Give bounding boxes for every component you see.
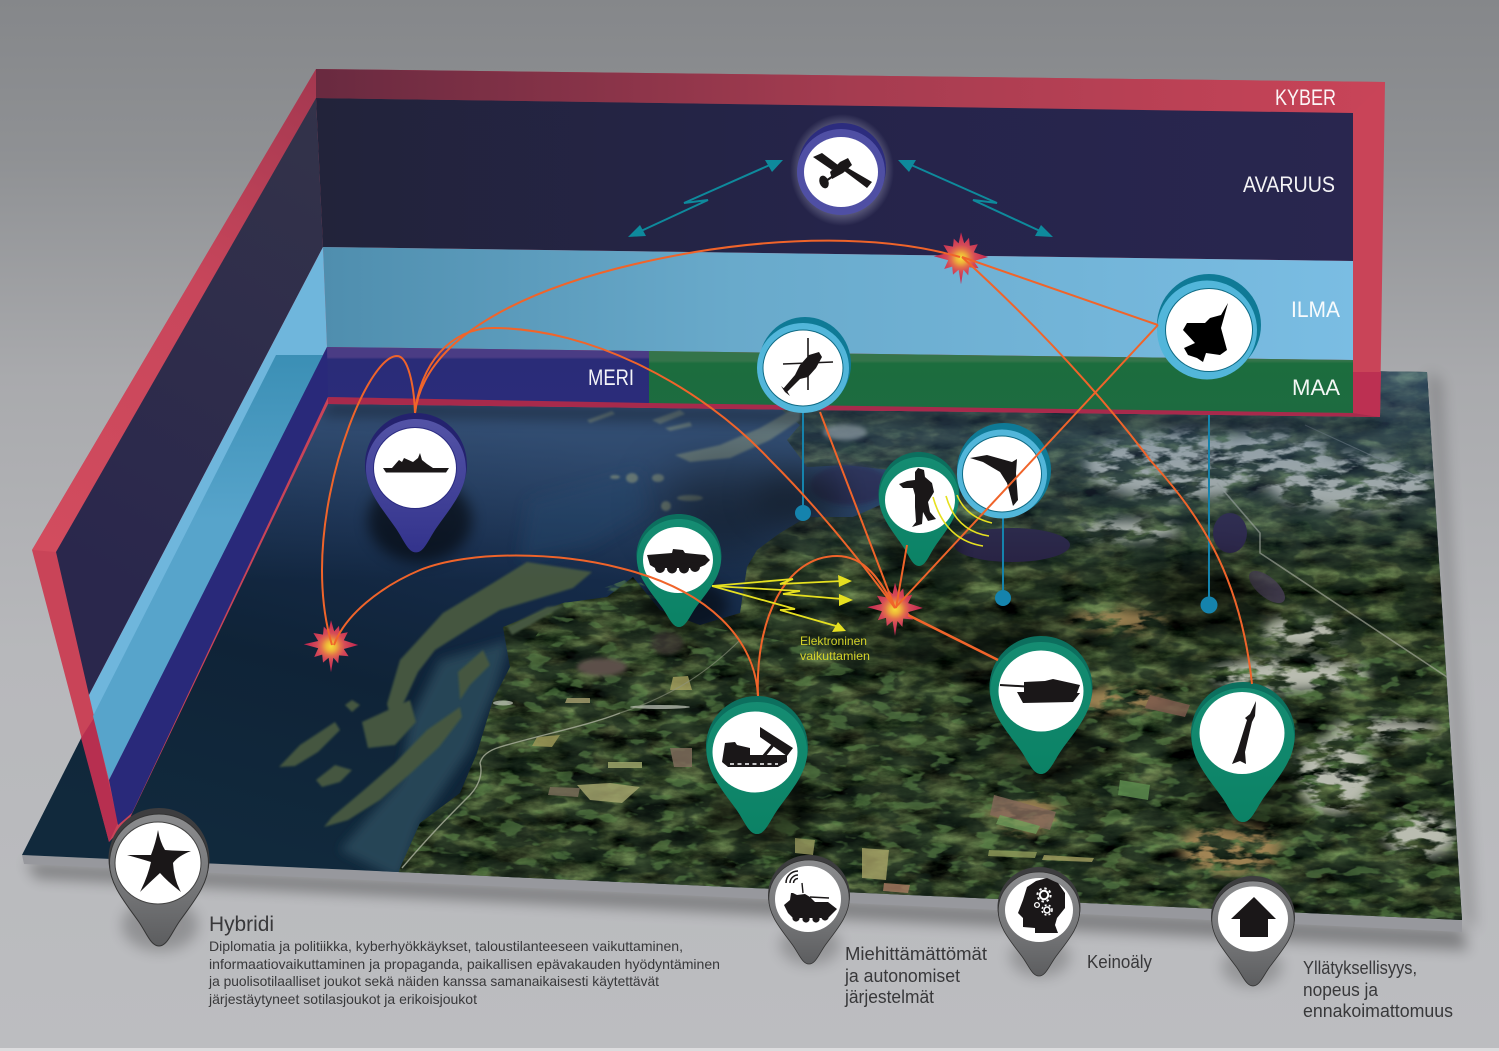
ilma back wall [323,247,1353,360]
label: electronic warfare [800,634,870,663]
text: hybrid description: Diplomatia ja politiikka, kyberhyökkäykset, taloustilanteeseen vaikuttaminen, [209,938,683,954]
icon: head with gears [1018,878,1065,933]
text: surprise: ennakoimattomuus [1303,1000,1453,1021]
town [823,424,867,440]
text: hybrid description [208,938,720,1007]
label: electronic warfare: Elektroninen [800,634,867,648]
strike paths [322,241,1252,696]
text: artificial intelligence: Keinoäly [1087,951,1153,972]
circle: satellite [790,114,894,226]
text: hybrid description: järjestäytyneet sotilasjoukot ja erikoisjoukot [208,991,477,1007]
icon: drone [970,455,1018,506]
icon: rocket launcher [722,727,793,767]
stem: drone [995,515,1011,606]
label: avaruus: AVARUUS [1243,172,1335,197]
text: hybrid description: informaatiovaikuttaminen ja propaganda, paikallisen epävakauden hyödyntäminen [209,956,720,972]
satellite map terrain [22,371,1462,920]
icon: unmanned vehicle [784,871,837,923]
label: maa: MAA [1292,375,1340,400]
pin: soldier [878,452,960,572]
label: electronic warfare: vaikuttamien [800,649,870,663]
land [395,360,1480,940]
communication arrows [628,160,1053,237]
label: kyber: KYBER [1275,85,1336,110]
label: meri: MERI [588,365,634,390]
arrow: satellite left link [628,160,783,237]
icon: tank [1000,679,1080,703]
pin: tank [990,636,1098,784]
terrain shadows [659,461,1260,677]
text: unmanned systems: Miehittämättömät [845,943,987,964]
meri side wall [109,347,328,825]
kyber frame [32,69,1385,842]
icon: missile [1232,701,1256,764]
icon: infantry vehicle [647,549,710,574]
cleared and pale ground [1080,431,1456,857]
pin: artificial intelligence [998,867,1080,977]
brown ground [991,610,1280,874]
icon: soldier [899,468,936,527]
icon: up arrow [1231,897,1276,937]
icon: helicopter [781,338,833,396]
explosion: upper [934,232,988,284]
heading: hybridi: Hybridi [209,913,274,936]
text: unmanned systems: järjestelmät [844,986,934,1007]
pin: missile [1191,682,1300,831]
lakes [954,528,1070,562]
strait [340,640,510,880]
electronic warfare arrows [712,575,853,632]
text: unmanned systems [844,943,987,1007]
fields [532,676,1190,893]
atmospheric haze [262,372,1438,558]
pin: rocket launcher [706,696,814,841]
meri back wall [327,347,649,403]
stem: jet [1200,378,1218,614]
explosion: land [867,583,923,636]
icon: satellite [813,153,872,190]
text: surprise [1303,957,1453,1021]
maa back wall [649,351,1353,413]
pin: hybrid [108,808,210,951]
ilma side wall [89,247,327,780]
peat bog [577,658,627,676]
pin: unmanned systems [768,855,850,965]
icon: ship [383,453,449,472]
circle: drone [957,423,1051,518]
pin: infantry vehicle (maa) [636,514,728,633]
text: unmanned systems: ja autonomiset [844,965,960,986]
circle: helicopter [757,317,851,413]
stem: helicopter [795,410,811,521]
explosion: sea [304,620,358,672]
wall labels [588,85,1340,400]
pin: ship (meri) [365,413,472,562]
roads [402,713,620,868]
map slab [0,340,1499,950]
villages [493,700,690,709]
signal waves [933,495,992,546]
pin: surprise and speed [1211,876,1295,987]
icon: jet [1183,303,1228,362]
text: hybrid description: ja puolisotilaalliset joukot sekä näiden kanssa samanaikaisesti käytettävät [208,973,659,989]
avaruus side wall [56,98,323,695]
text: surprise: nopeus ja [1303,979,1379,1000]
text: surprise: Yllätyksellisyys, [1303,957,1417,978]
legend text [208,913,1453,1021]
circle: jet [1157,274,1261,380]
map pin stems [795,378,1218,614]
domain walls [32,69,1385,842]
icon: star [127,830,191,892]
label: ilma: ILMA [1291,297,1340,322]
peninsula and islands [279,405,800,827]
avaruus back wall [316,98,1353,261]
arrow: satellite right link [898,160,1053,237]
